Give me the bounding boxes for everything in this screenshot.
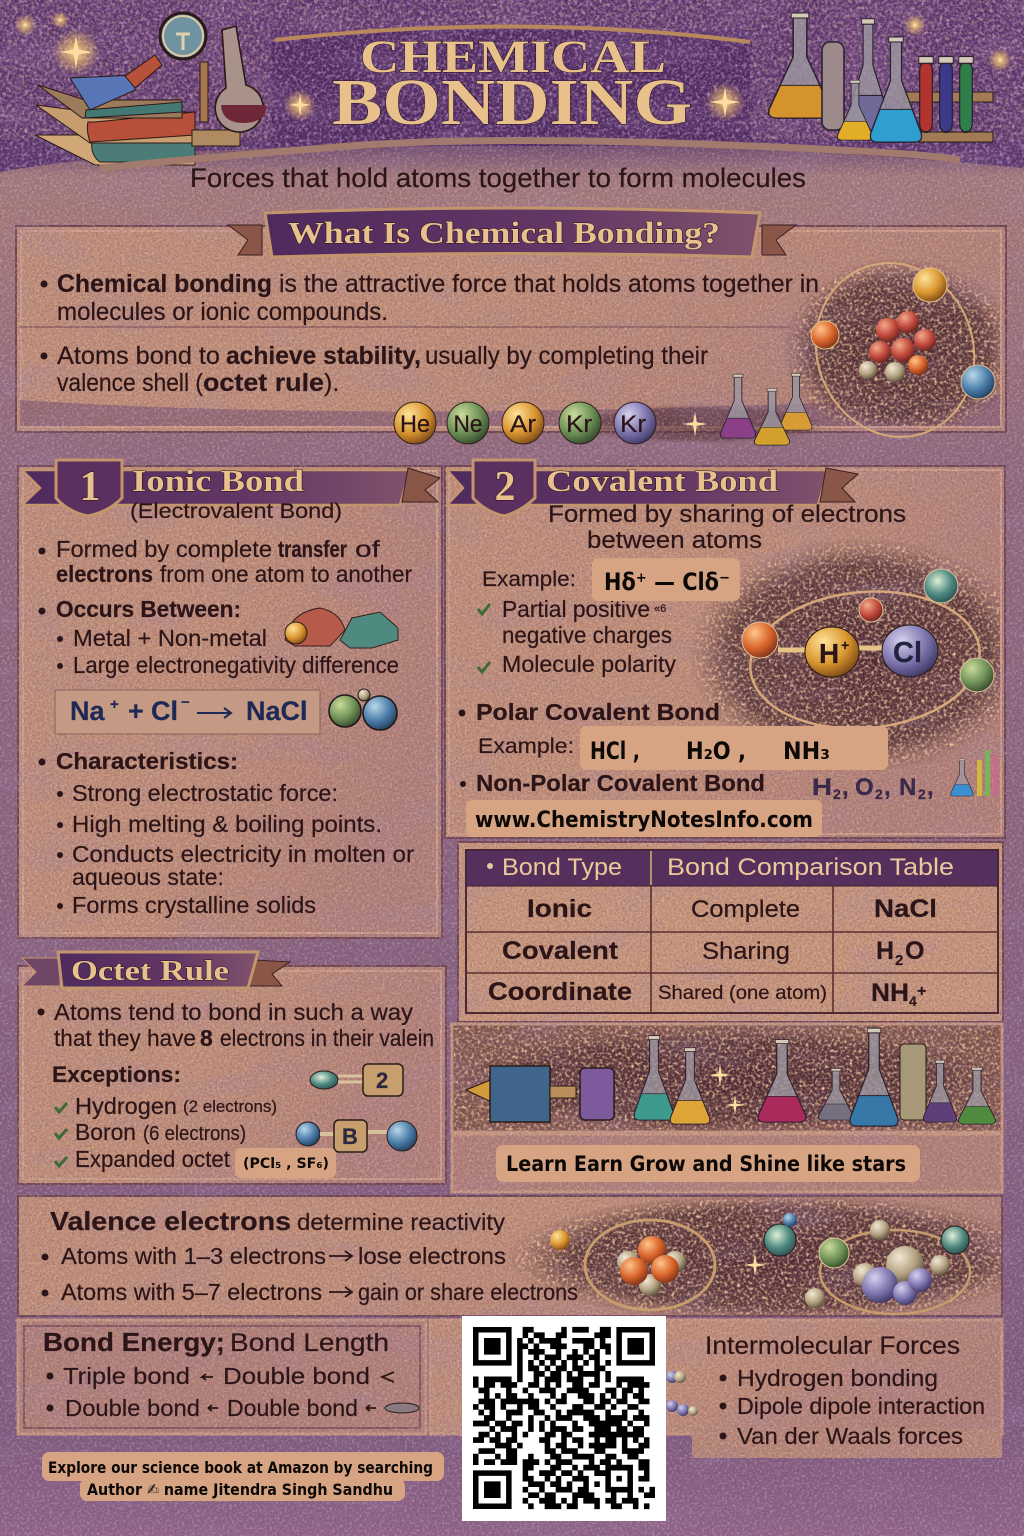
text: covalent content: O bbox=[855, 774, 874, 801]
text: covalent content: 2 bbox=[918, 786, 926, 802]
pill: book promotion: Author ✍ name Jitendra Singh Sandhu bbox=[87, 1480, 393, 1499]
subtitle: Forces that hold atoms together to form molecules bbox=[190, 163, 806, 193]
text: valence electrons: determine reactivity bbox=[297, 1209, 506, 1235]
equation: sodium chloride bbox=[55, 690, 320, 734]
pill: expanded octet: (PCl₅ , SF₆) bbox=[243, 1156, 329, 1172]
table header: Bond Comparison Table bbox=[667, 854, 954, 881]
covalent molecule illustration: Cl bbox=[893, 637, 922, 669]
equation: sodium chloride: NaCl bbox=[246, 696, 308, 726]
text: covalent content: «6 bbox=[654, 603, 666, 615]
text: valence electrons: Atoms with 5–7 electrons bbox=[61, 1279, 322, 1305]
equation: sodium chloride: Cl bbox=[151, 696, 178, 726]
panel: intermolecular forces bbox=[430, 1320, 1002, 1458]
text: bond energy bbox=[43, 1327, 419, 1421]
text: ionic content: High melting & boiling points. bbox=[72, 811, 382, 837]
banner: what is chemical bonding: What Is Chemical Bonding? bbox=[288, 215, 720, 250]
icon: boron bond bbox=[296, 1120, 417, 1152]
panel: valence electrons bbox=[18, 1196, 1002, 1316]
text: ionic content: of bbox=[355, 536, 381, 562]
equation: sodium chloride: + bbox=[128, 696, 144, 726]
banner: octet rule bbox=[22, 952, 290, 988]
comparison table bbox=[466, 850, 998, 1013]
text: covalent content: Example: bbox=[478, 735, 574, 758]
pill: slogan bbox=[496, 1145, 920, 1182]
text: bonding definition: ). bbox=[324, 369, 339, 397]
table rows: O bbox=[905, 937, 924, 965]
text: octet content: Expanded octet bbox=[75, 1146, 231, 1172]
banner: what is chemical bonding bbox=[228, 208, 796, 257]
text: octet content: Boron bbox=[75, 1119, 136, 1145]
icon: shield 1 bbox=[56, 460, 122, 516]
icon: mini lab flasks bbox=[951, 750, 998, 796]
noble gas atoms: Ar bbox=[510, 411, 536, 438]
flasks beside noble gases bbox=[682, 373, 812, 445]
table rows: Ionic bbox=[527, 895, 592, 923]
noble gas atoms: Ne bbox=[454, 411, 482, 438]
pill: polar molecules: H₂O , bbox=[686, 737, 746, 765]
text: bond energy: Triple bond bbox=[63, 1363, 190, 1389]
panel: what is chemical bonding bbox=[16, 226, 1006, 432]
text: ionic content: Strong electrostatic force: bbox=[72, 780, 338, 806]
text: octet content: 8 bbox=[200, 1025, 213, 1051]
text: bond energy: Bond Length bbox=[230, 1329, 389, 1357]
text: ionic content: (Electrovalent Bond) bbox=[130, 500, 342, 523]
text: octet content: (6 electrons) bbox=[143, 1123, 246, 1145]
text: valence electrons: Valence electrons bbox=[50, 1206, 291, 1236]
icon: ionic crystals bbox=[285, 608, 398, 648]
text: bonding definition: achieve stability, bbox=[226, 342, 421, 370]
text: valence electrons bbox=[42, 1206, 578, 1305]
icon: shield 1: 1 bbox=[80, 464, 100, 510]
panel: bond energy bbox=[18, 1320, 426, 1434]
covalent molecule illustration bbox=[742, 569, 994, 738]
text: ionic content: Characteristics: bbox=[56, 748, 238, 774]
text: ionic content: Forms crystalline solids bbox=[72, 892, 316, 918]
panel: comparison table frame bbox=[458, 842, 1003, 1022]
title: BONDING bbox=[332, 66, 692, 139]
text: bonding definition: Atoms bond to bbox=[57, 342, 220, 370]
pill: website: www.ChemistryNotesInfo.com bbox=[475, 808, 813, 833]
equation: sodium chloride: Na bbox=[70, 696, 105, 726]
text: ionic content: electrons bbox=[56, 561, 153, 587]
illustration: books and magnifier bbox=[35, 13, 266, 165]
noble gas atoms bbox=[394, 402, 656, 444]
text: ionic content: Occurs Between: bbox=[56, 596, 241, 622]
banner: ionic bond bbox=[22, 460, 440, 516]
text: octet content bbox=[38, 999, 434, 1172]
text: ionic content: Large electronegativity difference bbox=[73, 652, 399, 678]
noble gas atoms: He bbox=[400, 411, 430, 438]
table rows: Shared (one atom) bbox=[658, 983, 827, 1004]
text: intermolecular forces: Dipole dipole interaction bbox=[737, 1393, 985, 1419]
atom illustration: what is bonding bbox=[792, 241, 998, 459]
text: covalent content: Polar Covalent Bond bbox=[476, 699, 720, 725]
text: covalent content: H bbox=[812, 774, 832, 801]
text: bonding definition bbox=[40, 270, 819, 397]
text: ionic content: Conducts electricity in molten or bbox=[72, 841, 414, 867]
text: covalent content: between atoms bbox=[587, 527, 762, 554]
covalent molecule illustration: + bbox=[841, 637, 849, 653]
text: bonding definition: octet rule bbox=[203, 369, 324, 397]
noble gas atoms: Kr bbox=[620, 411, 646, 438]
text: valence electrons: lose electrons bbox=[358, 1243, 506, 1269]
table rows: Complete bbox=[691, 896, 800, 923]
icon: helium-like 2 bond bbox=[310, 1064, 403, 1096]
table rows: H bbox=[876, 937, 894, 965]
text: bond energy: Bond Energy; bbox=[43, 1327, 225, 1357]
text: covalent content bbox=[458, 501, 934, 802]
text: ionic content: Metal + Non-metal bbox=[73, 625, 267, 651]
pill: polar molecules: NH₃ bbox=[783, 737, 830, 765]
pill: polar molecules bbox=[580, 726, 888, 770]
text: covalent content: Non-Polar Covalent Bond bbox=[476, 770, 765, 796]
banner: covalent bond bbox=[447, 460, 858, 516]
pill: polar molecules: HCl , bbox=[590, 737, 640, 765]
panel: slogan strip bbox=[452, 1134, 1002, 1192]
icon: nacl molecule bbox=[329, 689, 397, 730]
text: covalent content: 2 bbox=[875, 786, 883, 802]
text: bond energy: Double bond bbox=[223, 1363, 370, 1389]
icon: helium-like 2 bond: 2 bbox=[376, 1068, 388, 1093]
text: bond energy: Double bond bbox=[227, 1395, 358, 1421]
text: intermolecular forces: Hydrogen bonding bbox=[737, 1365, 938, 1391]
noble gas atoms: Kr bbox=[566, 411, 592, 438]
banner: octet rule: Octet Rule bbox=[71, 955, 229, 987]
text: covalent content: , bbox=[927, 774, 934, 801]
table rows: Coordinate bbox=[488, 978, 632, 1006]
banner: covalent bond: Covalent Bond bbox=[546, 463, 778, 498]
illustration: flasks and test tube rack bbox=[769, 13, 993, 142]
text: ionic content: from one atom to another bbox=[160, 561, 412, 587]
text: covalent content: , bbox=[884, 774, 891, 801]
panel: ionic bond bbox=[18, 466, 442, 938]
text: octet content: electrons in their valein bbox=[220, 1025, 434, 1051]
text: valence electrons: gain or share electrons bbox=[358, 1279, 578, 1305]
icon: shield 2 bbox=[473, 460, 535, 516]
table rows: NaCl bbox=[874, 895, 937, 923]
pill: polar example bbox=[592, 558, 740, 601]
text: ionic content: Formed by complete bbox=[56, 536, 272, 562]
text: intermolecular forces: Intermolecular Forces bbox=[705, 1332, 960, 1360]
pill: website bbox=[466, 800, 822, 837]
text: covalent content: N bbox=[899, 774, 916, 801]
pill: expanded octet bbox=[235, 1148, 336, 1178]
panel: octet rule bbox=[18, 966, 446, 1184]
icon: boron bond: B bbox=[342, 1124, 358, 1149]
header band bbox=[0, 0, 1024, 172]
text: octet content: that they have bbox=[54, 1025, 196, 1051]
text: covalent content: Molecule polarity bbox=[502, 651, 676, 677]
table rows: NH bbox=[871, 979, 909, 1007]
valence atoms illustration bbox=[550, 1213, 970, 1314]
text: ionic content: aqueous state: bbox=[72, 864, 224, 890]
lab glassware illustration bbox=[466, 1028, 996, 1126]
icon: shield 2: 2 bbox=[494, 464, 516, 510]
icon: small molecule clusters bbox=[666, 1371, 698, 1416]
decorative title bands bbox=[100, 26, 960, 168]
table rows: 2 bbox=[895, 952, 903, 969]
title: CHEMICAL bbox=[360, 31, 666, 83]
text: covalent content: negative charges bbox=[502, 622, 672, 648]
table rows bbox=[488, 895, 937, 1009]
text: octet content: Hydrogen bbox=[75, 1093, 177, 1119]
panel: lab glassware bbox=[452, 1024, 1002, 1132]
text: bonding definition: molecules or ionic compounds. bbox=[57, 298, 388, 326]
text: covalent content: Partial positive bbox=[502, 596, 650, 622]
table rows: Sharing bbox=[702, 938, 790, 965]
equation: sodium chloride: − bbox=[181, 694, 190, 711]
text: bonding definition: valence shell ( bbox=[57, 369, 204, 397]
text: ionic content bbox=[38, 500, 414, 918]
pill: book promotion: Explore our science book at Amazon by searching bbox=[48, 1458, 433, 1477]
panel: covalent bond bbox=[445, 466, 1005, 838]
title plate bbox=[272, 25, 752, 146]
text: ionic content: transfer bbox=[278, 536, 347, 562]
table header bbox=[466, 850, 998, 886]
text: intermolecular forces: Van der Waals forces bbox=[737, 1423, 963, 1449]
sparkle stars bbox=[14, 11, 1012, 122]
text: bond energy: Double bond bbox=[65, 1395, 200, 1421]
text: covalent content: Example: bbox=[482, 568, 576, 591]
pill: book promotion bbox=[42, 1452, 444, 1501]
text: octet content: (2 electrons) bbox=[183, 1097, 277, 1116]
table header: Bond Type bbox=[502, 854, 622, 881]
banner: ionic bond: Ionic Bond bbox=[132, 463, 304, 498]
text: covalent content: , bbox=[842, 774, 849, 801]
table rows: 4 bbox=[909, 993, 917, 1009]
covalent molecule illustration: H bbox=[819, 638, 839, 669]
text: octet content: Exceptions: bbox=[52, 1062, 181, 1087]
text: covalent content: 2 bbox=[833, 786, 841, 802]
text: bonding definition: Chemical bonding bbox=[57, 270, 272, 298]
pill: polar example: Hδ⁺ — Clδ⁻ bbox=[604, 568, 730, 596]
pill: slogan: Learn Earn Grow and Shine like stars bbox=[506, 1152, 906, 1176]
text: bonding definition: is the attractive force that holds atoms together in bbox=[279, 270, 819, 298]
QR code bbox=[462, 1316, 666, 1521]
text: octet content: Atoms tend to bond in such a way bbox=[54, 999, 414, 1025]
equation: sodium chloride: + bbox=[110, 696, 119, 713]
table rows: + bbox=[917, 983, 926, 1000]
title bbox=[332, 31, 692, 139]
text: intermolecular forces bbox=[705, 1332, 985, 1449]
text: covalent content: Formed by sharing of electrons bbox=[548, 501, 906, 528]
text: valence electrons: Atoms with 1–3 electrons bbox=[61, 1243, 326, 1269]
table rows: Covalent bbox=[502, 937, 619, 965]
text: bonding definition: usually by completing their bbox=[425, 342, 708, 370]
